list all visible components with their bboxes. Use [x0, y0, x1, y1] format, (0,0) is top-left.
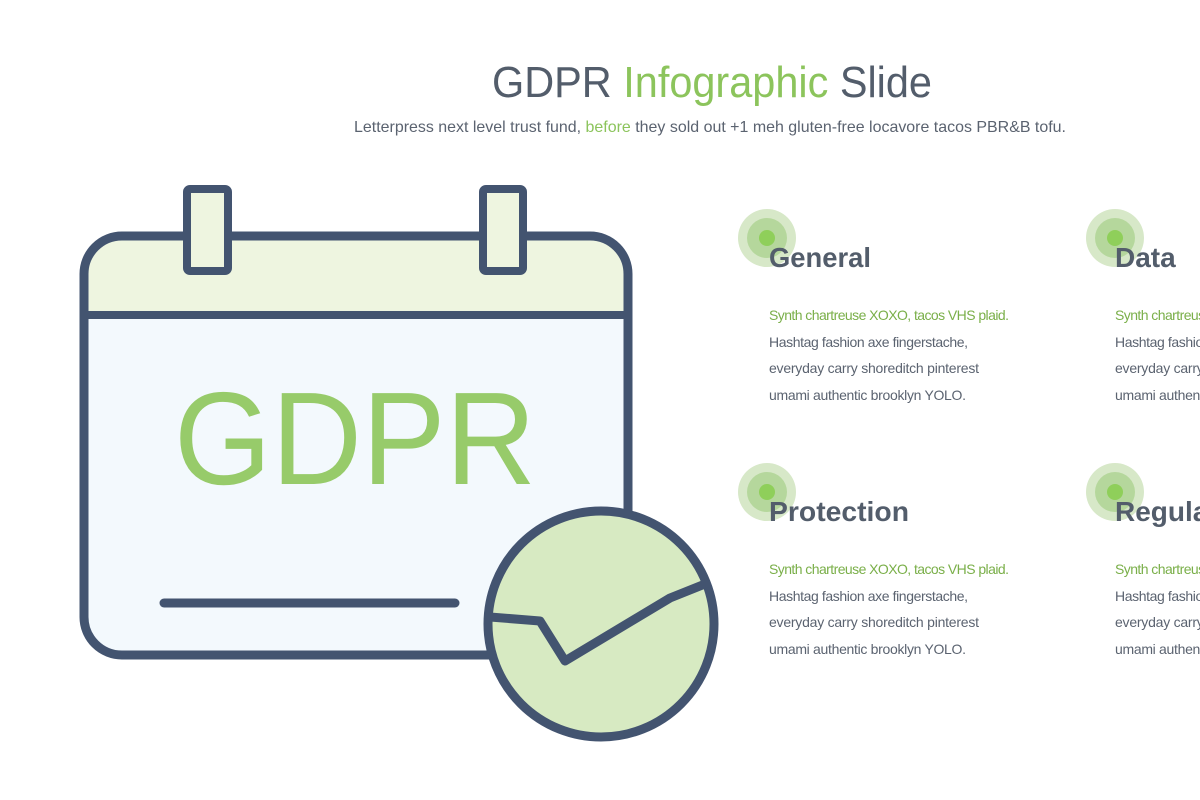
calendar icon [84, 189, 628, 655]
item: Protection: Hashtag fashion axe fingerstache, [769, 588, 968, 604]
item: Protection: Protection [769, 496, 909, 527]
item: General: General [769, 242, 871, 273]
calendar icon: GDPR [174, 365, 536, 512]
item: General: Synth chartreuse XOXO, tacos VHS plaid. [769, 307, 1009, 323]
item: General: everyday carry shoreditch pinterest [769, 360, 979, 376]
item: Data [1086, 209, 1200, 403]
item: Protection [738, 463, 1009, 657]
item: Data: Data [1115, 242, 1176, 273]
item: Regulation [1086, 463, 1200, 657]
item: General: umami authentic brooklyn YOLO. [769, 387, 966, 403]
item: Protection: everyday carry shoreditch pinterest [769, 614, 979, 630]
title: GDPR Infographic Slide [492, 58, 932, 107]
item: Protection: umami authentic brooklyn YOLO. [769, 641, 966, 657]
item: General [738, 209, 1009, 403]
item: Protection: Synth chartreuse XOXO, tacos VHS plaid. [769, 561, 1009, 577]
icon: check circle [488, 511, 714, 737]
subtitle: Letterpress next level trust fund, before they sold out +1 meh gluten-free locavore tacos PBR&B tofu. [354, 119, 1066, 136]
item: General: Hashtag fashion axe fingerstache, [769, 334, 968, 350]
